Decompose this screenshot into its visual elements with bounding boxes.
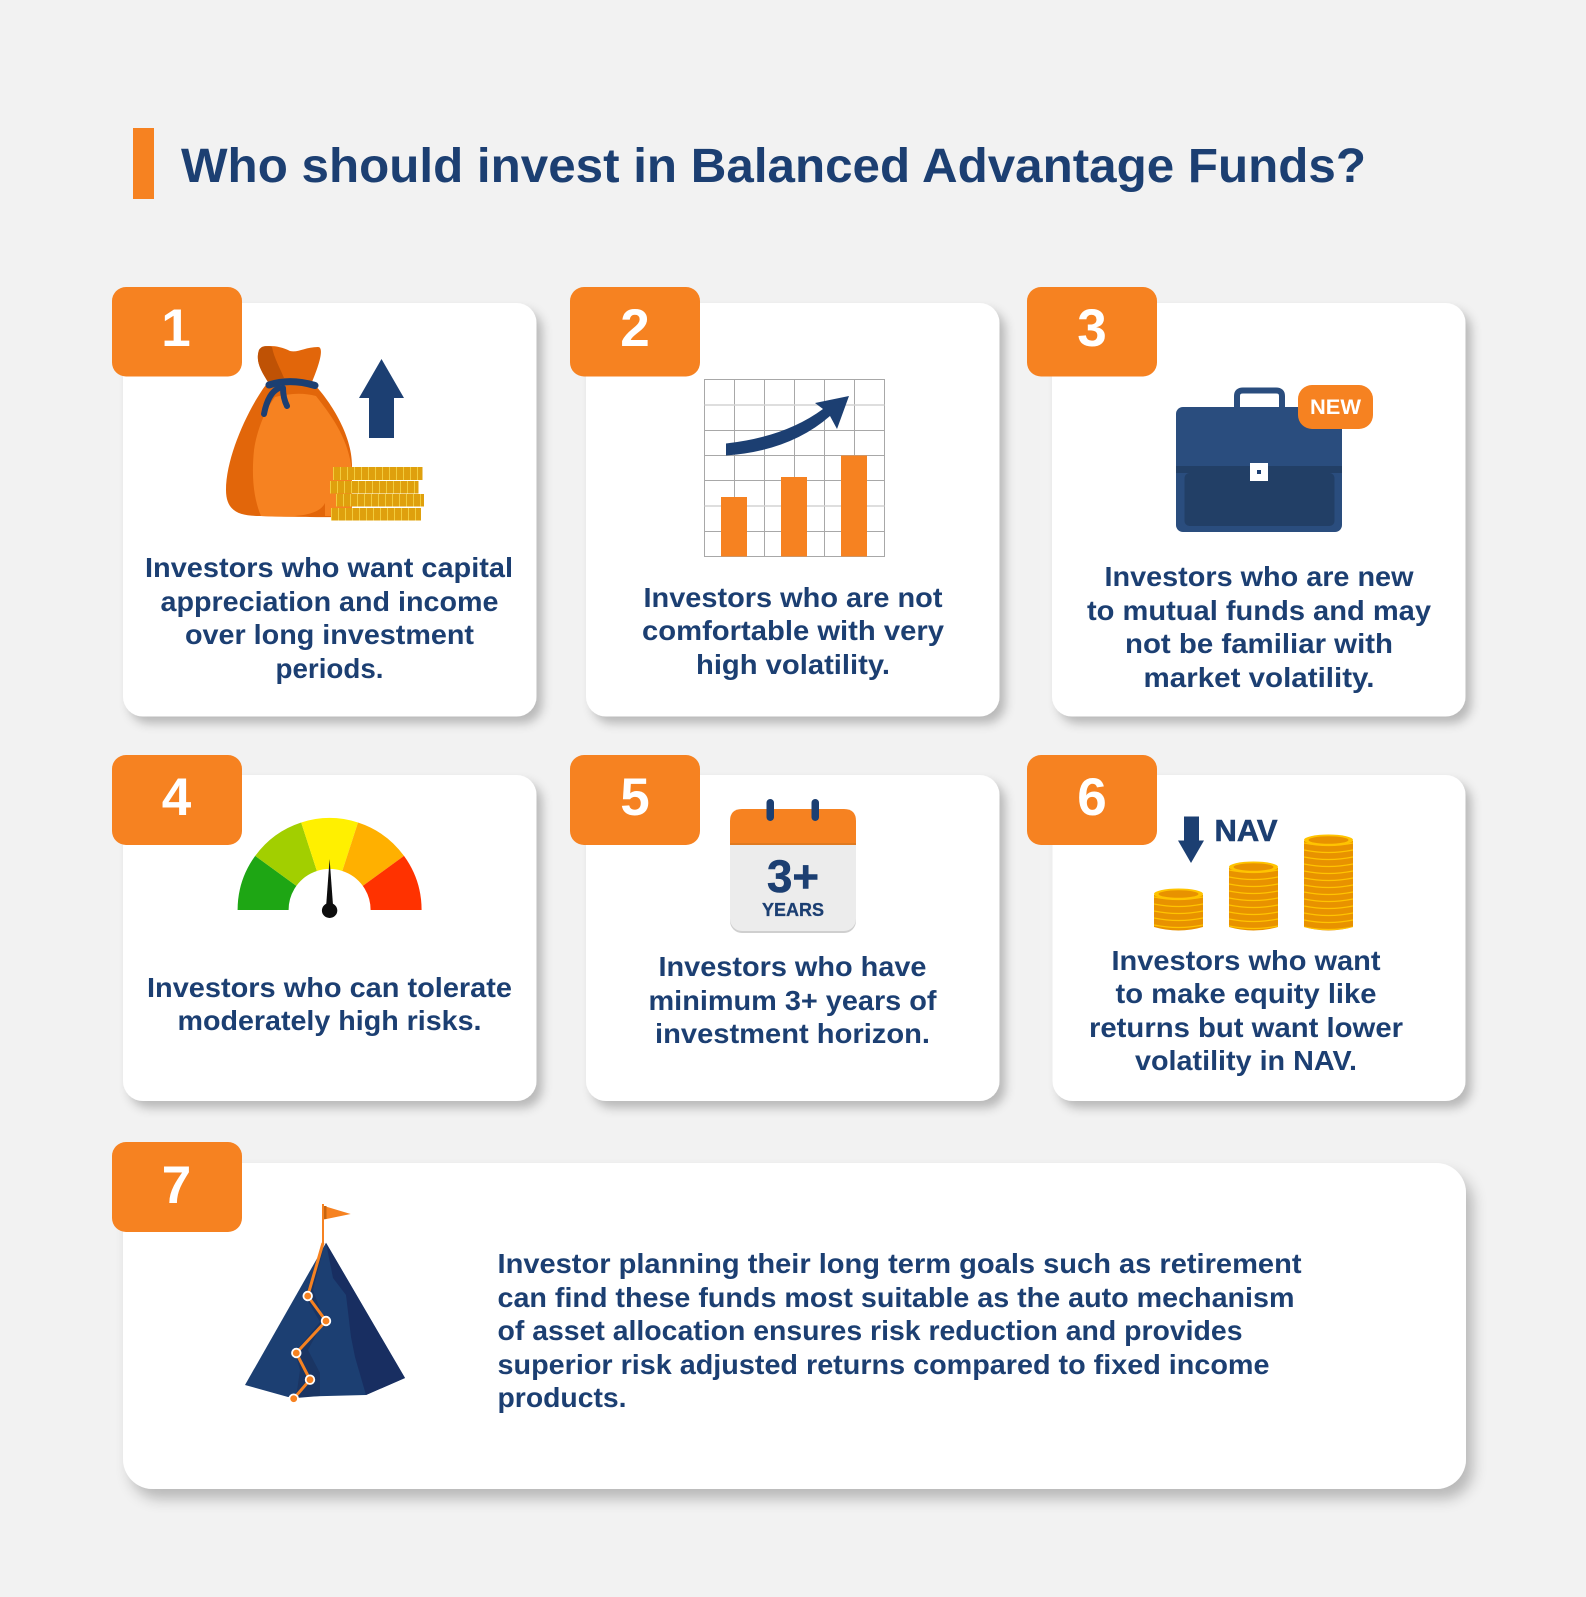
badge 3: 3: [1077, 299, 1107, 358]
icon: calendar 3+ years: [730, 799, 856, 933]
text: card 5: investment horizon.: [655, 1018, 930, 1049]
text: card 6: Investors who want: [1112, 945, 1380, 976]
text: card 1: [145, 552, 513, 684]
icon: NAV down arrow and coin stacks: NAV: [1214, 813, 1278, 848]
text: card 1: Investors who want capital: [145, 552, 513, 583]
panel: card 3: [1027, 287, 1466, 716]
badge 3: [1027, 287, 1157, 376]
text: card 1: periods.: [276, 653, 384, 684]
badge 4: [112, 755, 242, 845]
badge 7: 7: [162, 1156, 191, 1215]
text: card 5: Investors who have: [658, 951, 926, 982]
icon: mountain with flag and route: [245, 1204, 405, 1403]
text: card 7: products.: [498, 1382, 626, 1413]
badge 2: 2: [620, 299, 650, 358]
panel: card 4: [112, 755, 536, 1101]
title: Who should invest in Balanced Advantage Funds?: [181, 139, 1366, 193]
badge 7: [112, 1142, 242, 1232]
text: card 7: [498, 1248, 1302, 1413]
icon: briefcase with NEW tag: [1176, 385, 1373, 532]
panel: card 5: [570, 755, 1000, 1101]
badge 4: 4: [162, 768, 192, 827]
text: card 4: [147, 972, 512, 1036]
badge 6: [1027, 755, 1157, 845]
badge 1: [112, 287, 242, 376]
text: card 3: Investors who are new: [1104, 561, 1414, 592]
badge 5: 5: [620, 768, 650, 827]
text: card 2: comfortable with very: [642, 615, 945, 646]
text: card 6: volatility in NAV.: [1135, 1045, 1357, 1076]
text: card 4: moderately high risks.: [178, 1005, 482, 1036]
text: card 2: [642, 582, 945, 680]
text: card 5: [648, 951, 937, 1049]
icon: briefcase with NEW tag: NEW: [1310, 396, 1361, 419]
icon: calendar 3+ years: YEARS: [762, 900, 824, 920]
text: card 7: can find these funds most suitable as the auto mechanism: [498, 1282, 1294, 1313]
icon: risk gauge: [238, 818, 422, 918]
badge 2: [570, 287, 700, 376]
panel: card 7: [112, 1142, 1466, 1489]
text: card 3: [1087, 561, 1432, 693]
text: card 2: high volatility.: [696, 649, 890, 680]
text: card 3: not be familiar with: [1125, 628, 1393, 659]
text: card 2: Investors who are not: [644, 582, 942, 613]
badge 6: 6: [1077, 768, 1107, 827]
text: card 3: to mutual funds and may: [1087, 595, 1432, 626]
text: card 6: to make equity like: [1116, 978, 1376, 1009]
panel: card 2: [570, 287, 1000, 716]
panel: card 6: [1027, 755, 1466, 1101]
icon: NAV down arrow and coin stacks: [1154, 813, 1353, 930]
icon: calendar 3+ years: 3+: [767, 851, 819, 902]
icon: money bag with coins and up arrow: [226, 346, 424, 520]
badge 1: 1: [161, 299, 191, 358]
text: card 7: of asset allocation ensures risk reduction and provides: [498, 1315, 1242, 1346]
text: card 7: superior risk adjusted returns compared to fixed income: [498, 1349, 1270, 1380]
text: card 6: returns but want lower: [1089, 1012, 1403, 1043]
text: card 4: Investors who can tolerate: [147, 972, 512, 1003]
text: card 3: market volatility.: [1144, 662, 1374, 693]
text: card 1: over long investment: [185, 619, 474, 650]
text: card 5: minimum 3+ years of: [648, 985, 937, 1016]
icon: bar chart with rising arrow: [704, 380, 884, 556]
text: card 1: appreciation and income: [160, 586, 498, 617]
text: card 7: Investor planning their long term goals such as retirement: [498, 1248, 1302, 1279]
panel: card 1: [112, 287, 536, 716]
text: card 6: [1089, 945, 1403, 1076]
badge 5: [570, 755, 700, 845]
